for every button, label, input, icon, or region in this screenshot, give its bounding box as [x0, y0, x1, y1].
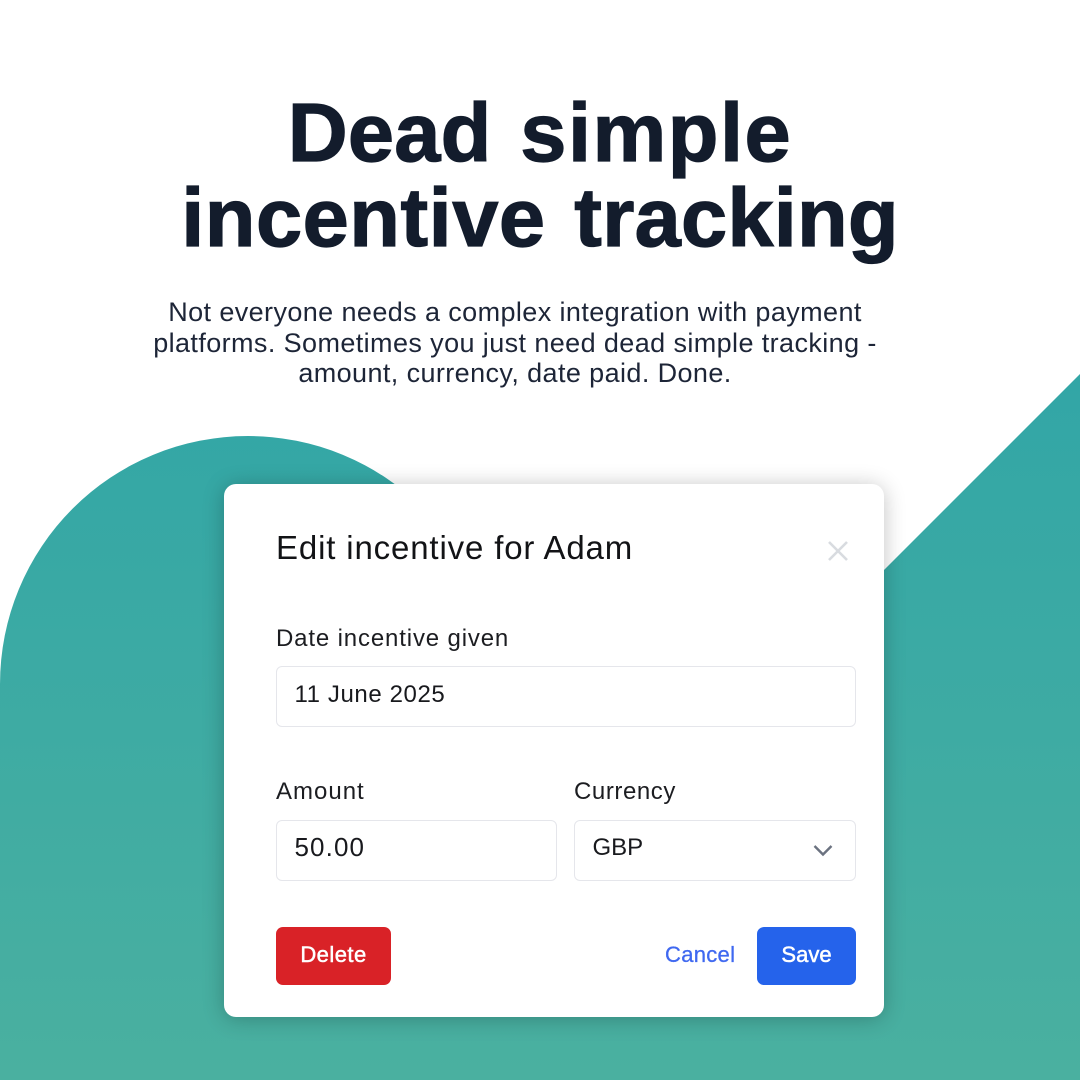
- cancel link: Cancel: [665, 942, 735, 967]
- panel: edit incentive dialog: [224, 484, 884, 1017]
- save button: [757, 927, 856, 985]
- amount value: 50.00: [294, 832, 365, 862]
- icon: close: [828, 541, 848, 561]
- delete button: [276, 927, 391, 985]
- save button: Save: [781, 942, 832, 967]
- amount label: Amount: [276, 778, 365, 805]
- dialog heading: Edit incentive for Adam: [276, 529, 633, 566]
- title: Dead simple: [288, 86, 792, 179]
- currency select: [574, 820, 856, 881]
- currency label: Currency: [574, 778, 676, 805]
- title: [181, 86, 899, 264]
- description text: amount, currency, date paid. Done.: [298, 358, 732, 388]
- date label: Date incentive given: [276, 625, 509, 652]
- title: incentive tracking: [181, 171, 899, 264]
- amount input: [276, 820, 557, 881]
- delete button: Delete: [300, 942, 367, 967]
- icon: chevron: [814, 845, 832, 856]
- date input: [276, 666, 856, 727]
- description text: [153, 297, 877, 388]
- currency value: GBP: [592, 834, 643, 861]
- date value: 11 June 2025: [294, 681, 445, 708]
- description text: Not everyone needs a complex integration with payment: [168, 297, 862, 327]
- description text: platforms. Sometimes you just need dead simple tracking -: [153, 328, 877, 358]
